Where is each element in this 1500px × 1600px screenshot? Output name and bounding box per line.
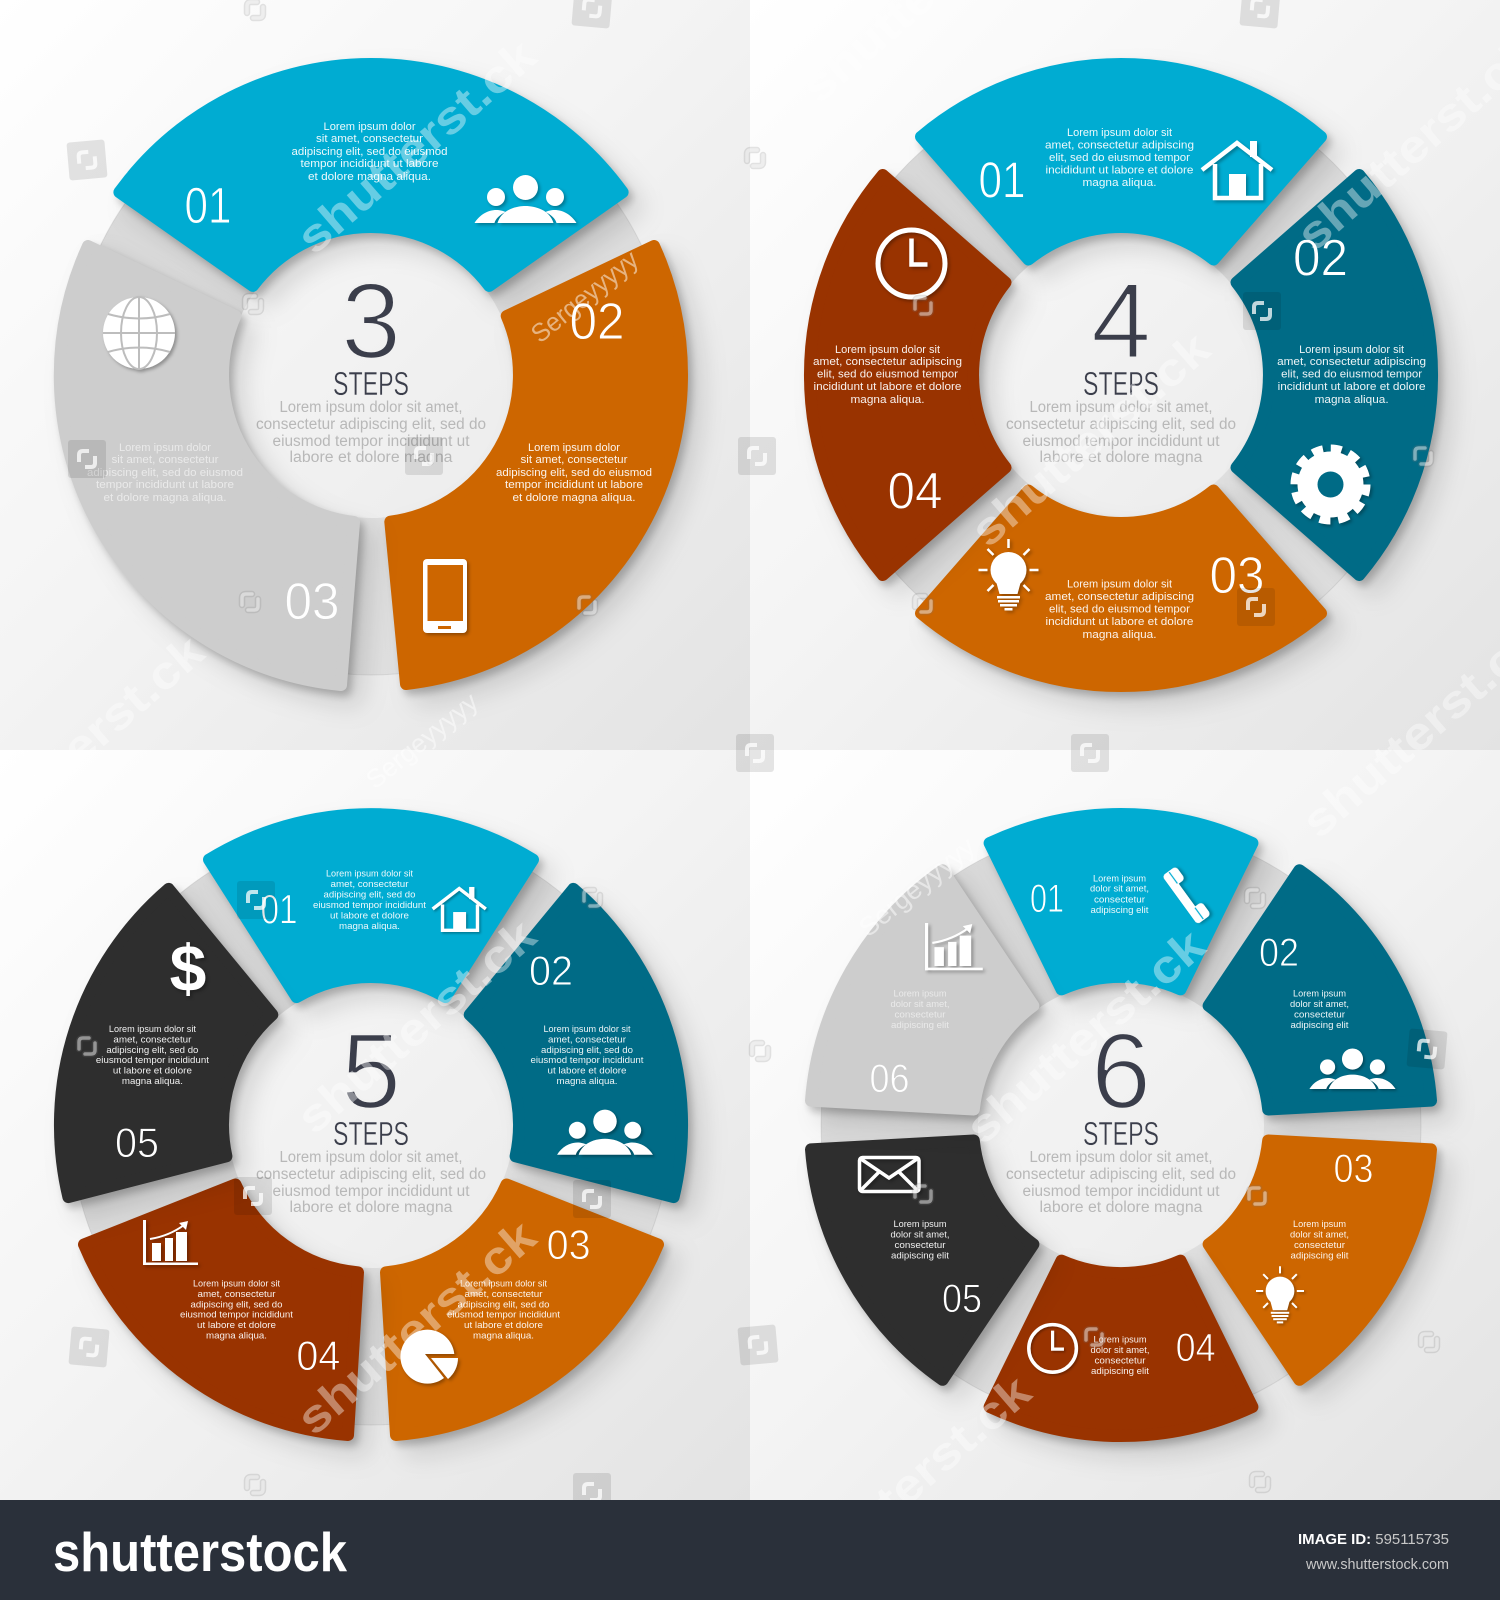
segment 01 blue: consectetur (1094, 894, 1145, 906)
segment 03 orange (386, 1184, 658, 1435)
icon: clock (1029, 1325, 1076, 1372)
segment 01 blue: et dolore magna aliqua. (308, 171, 431, 183)
center disk (228, 982, 514, 1268)
icon: light bulb (1256, 1266, 1304, 1323)
segment 04 brown: incididunt ut labore et dolore (814, 381, 962, 393)
segment 02 teal: Lorem ipsum dolor sit (1299, 344, 1404, 356)
panel: 4 steps chart (810, 64, 1432, 686)
segment 01 blue: tempor incididunt ut labore (300, 158, 438, 170)
footer logo: shutterstock (53, 1521, 347, 1583)
segment 04 brown: magna aliqua. (206, 1330, 267, 1342)
segment 05 dark (60, 889, 272, 1197)
center disk (228, 232, 514, 518)
center description (256, 1149, 486, 1216)
shutterstock watermarks: shutterst.ck (286, 1209, 546, 1445)
segment 02 teal (1236, 175, 1432, 575)
center description: consectetur adipiscing elit, sed do (256, 416, 486, 433)
segment 01 blue (119, 64, 623, 286)
segment 02 teal: elit, sed do eiusmod tempor (1281, 368, 1422, 380)
segment 04 brown (810, 175, 1006, 575)
center description (1006, 1149, 1236, 1216)
segment 02 teal: ut labore et dolore (548, 1066, 626, 1076)
segment 04 brown: amet, consectetur (198, 1289, 276, 1300)
panel: 6 steps chart (811, 814, 1431, 1436)
segment 02 teal: 02 (1259, 931, 1299, 975)
segment 02 teal: amet, consectetur adipiscing (1277, 356, 1426, 368)
icon: dollar sign: $ (170, 931, 206, 1005)
center heading: 4 steps: 4 (1091, 260, 1151, 381)
segment 03 orange: amet, consectetur (464, 1289, 542, 1300)
segment 05 dark: adipiscing elit (891, 1250, 949, 1262)
segment 05 dark: eiusmod tempor incididunt (96, 1055, 209, 1066)
segment 04 brown (990, 1261, 1252, 1436)
segment 01 blue: magna aliqua. (339, 921, 400, 932)
segment 03 grey: adipiscing elit, sed do eiusmod (87, 467, 243, 479)
base ring (71, 825, 671, 1425)
segment 03 grey (60, 246, 354, 685)
segment 01 blue: Lorem ipsum dolor (324, 121, 416, 133)
icon: pie chart (400, 1330, 458, 1384)
center heading: 3 steps (333, 260, 409, 402)
segment 02 teal: Lorem ipsum dolor sit (544, 1024, 631, 1035)
panel: 3 steps chart (60, 64, 682, 685)
segment 03 orange: amet, consectetur adipiscing (1045, 591, 1194, 603)
segment 04 brown: 04 (296, 1332, 340, 1379)
segment 03 grey: sit amet, consectetur (112, 454, 219, 466)
shutterstock watermarks: Sergeyyyyy (853, 831, 981, 943)
segment 02 teal: dolor sit amet, (1290, 999, 1349, 1010)
segment 03 grey: 03 (284, 573, 340, 631)
segment 04 brown: Lorem ipsum dolor sit (835, 344, 940, 356)
base ring (821, 825, 1421, 1425)
segment 02 teal: 02 (529, 947, 573, 994)
center description: labore et dolore magna (290, 449, 453, 466)
segment 06 grey: dolor sit amet, (890, 999, 950, 1010)
icon: globe (103, 297, 175, 369)
segment 03 orange: elit, sed do eiusmod tempor (1049, 604, 1190, 616)
center heading: 6 steps (1083, 1010, 1159, 1152)
segment 03 grey: et dolore magna aliqua. (104, 492, 226, 504)
segment 02 teal: eiusmod tempor incididunt (530, 1055, 644, 1066)
segment 01 blue: Lorem ipsum (1093, 874, 1146, 884)
segment 04 brown: adipiscing elit, sed do (190, 1300, 282, 1310)
segment 01 blue: Lorem ipsum dolor sit (326, 868, 413, 880)
segment 02 orange: 02 (570, 293, 624, 351)
segment 01 blue: adipiscing elit (1090, 905, 1149, 916)
segment 04 brown: dolor sit amet, (1090, 1345, 1150, 1356)
segment 05 dark: consectetur (894, 1240, 946, 1251)
icon: envelope (860, 1158, 919, 1192)
center description: Lorem ipsum dolor sit amet, (1030, 399, 1212, 416)
segment 01 blue: Lorem ipsum dolor sit (1067, 127, 1172, 139)
segment 02 teal: amet, consectetur (548, 1034, 626, 1046)
icon: bar chart (143, 1220, 198, 1265)
segment 01 blue: ut labore et dolore (330, 910, 409, 922)
panel: 5 steps chart (60, 814, 682, 1435)
segment 01 blue: elit, sed do eiusmod tempor (1049, 152, 1190, 164)
segment 01 blue: adipiscing elit, sed do eiusmod (292, 146, 448, 158)
center description: labore et dolore magna (1040, 449, 1203, 466)
segment 02 orange (390, 246, 682, 684)
center heading: 5 steps: STEPS (333, 1115, 409, 1152)
segment 05 dark: dolor sit amet, (890, 1230, 950, 1240)
segment 03 orange: adipiscing elit, sed do (458, 1300, 550, 1310)
segment 03 orange: eiusmod tempor incididunt (447, 1310, 560, 1320)
segment 03 orange (921, 490, 1321, 686)
image id: IMAGE ID: 595115735 (1298, 1531, 1449, 1548)
segment 04 brown: elit, sed do eiusmod tempor (817, 368, 958, 380)
segment 04 brown: eiusmod tempor incididunt (180, 1310, 293, 1320)
shutterstock watermarks: Sergeyyyyy (525, 244, 644, 349)
segment 05 dark: Lorem ipsum dolor sit (109, 1024, 196, 1035)
segment 06 grey: consectetur (894, 1010, 946, 1020)
segment 04 brown: 04 (888, 462, 942, 520)
segment 01 blue: amet, consectetur adipiscing (1045, 140, 1194, 152)
center description (1006, 399, 1236, 466)
segment 03 orange: Lorem ipsum dolor sit (1067, 579, 1172, 591)
footer bar (0, 1500, 1500, 1600)
segment 05 dark (811, 1140, 1033, 1380)
center description: labore et dolore magna (290, 1199, 453, 1216)
center heading: 5 steps: 5 (341, 1010, 401, 1131)
icon: house (1202, 141, 1272, 198)
center heading: 4 steps: STEPS (1083, 365, 1159, 402)
segment 04 brown: Lorem ipsum dolor sit (193, 1278, 280, 1290)
shutterstock watermarks: shutterst.ck (960, 321, 1220, 557)
segment 06 grey: 06 (870, 1057, 910, 1101)
segment 05 dark: magna aliqua. (122, 1076, 183, 1087)
segment 03 grey: Lorem ipsum dolor (119, 442, 211, 454)
segment 01 blue: sit amet, consectetur (316, 133, 423, 145)
segment 02 teal (1209, 870, 1431, 1110)
segment 03 orange: magna aliqua. (473, 1330, 534, 1342)
segment 03 orange: magna aliqua. (1082, 629, 1156, 641)
base ring (71, 75, 671, 675)
center description: eiusmod tempor incididunt ut (1022, 1183, 1220, 1200)
segment 03 orange: Lorem ipsum (1293, 1219, 1346, 1230)
segment 01 blue: 01 (978, 152, 1026, 208)
center heading: 3 steps: 3 (341, 260, 401, 381)
center description (256, 399, 486, 466)
website: www.shutterstock.com (1305, 1556, 1449, 1573)
segment 04 brown: 04 (1176, 1326, 1216, 1370)
segment 05 dark: 05 (115, 1119, 159, 1166)
segment 05 dark: adipiscing elit, sed do (106, 1045, 198, 1056)
segment 01 blue (209, 814, 533, 997)
segment 02 teal: adipiscing elit, sed do (541, 1045, 633, 1056)
segment 01 blue: 01 (260, 886, 298, 933)
center description: Lorem ipsum dolor sit amet, (1030, 1149, 1212, 1166)
shutterstock watermarks: Sergeyyyyy (360, 686, 484, 795)
segment 01 blue: incididunt ut labore et dolore (1046, 164, 1194, 176)
segment 02 orange: sit amet, consectetur (520, 454, 628, 466)
segment 02 teal (470, 889, 682, 1197)
center description: Lorem ipsum dolor sit amet, (280, 1149, 462, 1166)
icon: telephone handset (1162, 866, 1211, 925)
segment 01 blue (990, 814, 1252, 989)
segment 01 blue: 01 (1030, 877, 1064, 921)
segment 03 orange: 03 (547, 1221, 591, 1268)
segment 06 grey: adipiscing elit (891, 1020, 949, 1031)
segment 05 dark: amet, consectetur (113, 1034, 191, 1046)
segment 02 teal: Lorem ipsum (1293, 988, 1346, 1000)
icon: gear (1294, 448, 1366, 520)
segment 05 dark: Lorem ipsum (894, 1219, 947, 1230)
segment 04 brown: adipiscing elit (1091, 1366, 1149, 1377)
icon: house (433, 887, 486, 930)
center heading: 3 steps: STEPS (333, 365, 409, 402)
segment 01 blue (921, 64, 1321, 260)
segment 02 orange: tempor incididunt ut labore (505, 479, 643, 491)
shutterstock watermarks: shutterst.ck (781, 1364, 1041, 1600)
segment 03 orange: consectetur (1294, 1240, 1345, 1251)
segment 03 orange: ut labore et dolore (464, 1320, 543, 1331)
segment 03 orange (1209, 1140, 1431, 1380)
segment 02 teal: magna aliqua. (1315, 394, 1389, 406)
center description: eiusmod tempor incididunt ut (272, 433, 470, 450)
center description: eiusmod tempor incididunt ut (1022, 433, 1220, 450)
segment 02 teal: 02 (1293, 230, 1348, 288)
shutterstock watermarks: shutterst.ck (286, 908, 546, 1144)
icon: light bulb (978, 539, 1038, 610)
segment 03 orange: 03 (1210, 547, 1264, 605)
center description: eiusmod tempor incididunt ut (272, 1183, 470, 1200)
center description: consectetur adipiscing elit, sed do (256, 1166, 486, 1183)
segment 02 teal: adipiscing elit (1290, 1020, 1349, 1031)
icon: people (557, 1110, 653, 1155)
segment 06 grey (811, 870, 1033, 1110)
center heading: 4 steps (1083, 260, 1159, 402)
icon: people (1309, 1048, 1396, 1089)
segment 04 brown: magna aliqua. (850, 394, 924, 406)
shutterstock watermarks: shutterst.ck (286, 28, 546, 264)
segment 03 grey: tempor incididunt ut labore (96, 479, 234, 491)
segment 04 brown: consectetur (1094, 1356, 1146, 1366)
segment 01 blue: eiusmod tempor incididunt (313, 900, 426, 911)
segment 06 grey: Lorem ipsum (894, 988, 947, 1000)
segment 04 brown: Lorem ipsum (1094, 1334, 1147, 1346)
segment 04 brown: amet, consectetur adipiscing (813, 356, 962, 368)
segment 02 orange: adipiscing elit, sed do eiusmod (496, 467, 652, 479)
segment 03 orange: 03 (1334, 1147, 1374, 1191)
segment 03 orange: incididunt ut labore et dolore (1046, 616, 1194, 628)
segment 02 orange: et dolore magna aliqua. (512, 492, 636, 504)
icon: people (474, 175, 576, 223)
segment 01 blue: adipiscing elit, sed do (324, 890, 416, 900)
center heading: 5 steps (333, 1010, 409, 1152)
center heading: 6 steps: STEPS (1083, 1115, 1159, 1152)
segment 03 orange: Lorem ipsum dolor sit (460, 1278, 547, 1290)
center description: labore et dolore magna (1040, 1199, 1203, 1216)
center disk (978, 232, 1264, 518)
segment 03 orange: dolor sit amet, (1290, 1230, 1349, 1240)
segment 01 blue: amet, consectetur (330, 879, 408, 890)
segment 02 teal: incididunt ut labore et dolore (1278, 381, 1426, 393)
center description: consectetur adipiscing elit, sed do (1006, 1166, 1236, 1183)
center disk (978, 982, 1264, 1268)
segment 02 orange: Lorem ipsum dolor (528, 442, 620, 454)
shutterstock watermarks: shutterst.ck (955, 918, 1215, 1154)
center description: Lorem ipsum dolor sit amet, (280, 399, 462, 416)
base ring (821, 75, 1421, 675)
segment 04 brown: ut labore et dolore (197, 1320, 276, 1331)
segment 02 teal: magna aliqua. (556, 1076, 618, 1087)
segment 04 brown (84, 1184, 358, 1435)
center heading: 6 steps: 6 (1091, 1010, 1151, 1131)
segment 05 dark: 05 (942, 1277, 982, 1321)
center description: consectetur adipiscing elit, sed do (1006, 416, 1236, 433)
segment 01 blue: dolor sit amet, (1090, 884, 1149, 894)
segment 01 blue: magna aliqua. (1082, 177, 1156, 189)
segment 02 teal: consectetur (1294, 1010, 1345, 1020)
icon: smartphone (423, 559, 467, 633)
icon: bar chart (925, 923, 983, 970)
icon: clock (878, 230, 945, 297)
segment 05 dark: ut labore et dolore (113, 1066, 192, 1076)
segment 03 orange: adipiscing elit (1290, 1250, 1349, 1262)
segment 01 blue: 01 (184, 177, 232, 234)
